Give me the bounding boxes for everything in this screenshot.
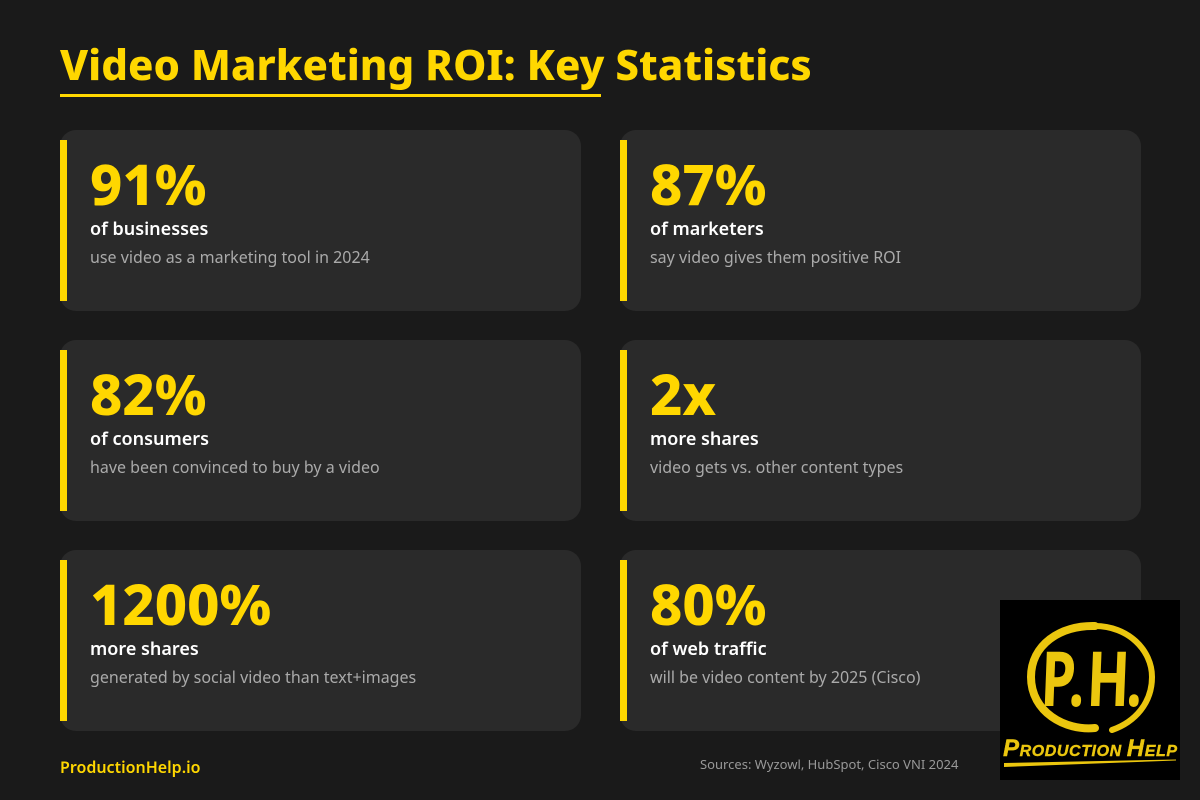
panel: 2x more shares: more shares (650, 427, 759, 451)
panel: 82% of consumers: of consumers (90, 427, 209, 451)
title: Video Marketing ROI: Key Statistics (60, 36, 812, 93)
panel: 91% of businesses: of businesses (90, 217, 208, 241)
panel: 82% of consumers (60, 340, 581, 521)
panel: 80% of web traffic: will be video content by 2025 (Cisco) (650, 666, 921, 688)
logo: Production Help (1000, 600, 1180, 780)
panel: 2x more shares: video gets vs. other content types (650, 456, 903, 478)
panel: 80% of web traffic: 80% (650, 566, 766, 642)
panel: 80% of web traffic (620, 550, 1141, 731)
panel: 1200% more shares (60, 550, 581, 731)
panel: 2x more shares: 2x (650, 356, 716, 432)
icon: P.H. monogram: P.H. (1039, 625, 1145, 729)
panel: 82% of consumers: have been convinced to buy by a video (90, 456, 380, 478)
panel: 91% of businesses (60, 130, 581, 311)
panel: 80% of web traffic: of web traffic (650, 637, 767, 661)
panel: 87% of marketers (620, 130, 1141, 311)
logo underline (1004, 760, 1176, 767)
panel: 91% of businesses: 91% (90, 146, 206, 222)
icon: brush circle (1031, 626, 1152, 730)
panel: 1200% more shares: more shares (90, 637, 199, 661)
panel: 87% of marketers: of marketers (650, 217, 764, 241)
panel: 91% of businesses: use video as a marketing tool in 2024 (90, 246, 370, 268)
footer brand: ProductionHelp.io (60, 756, 201, 778)
panel: 1200% more shares: 1200% (90, 566, 271, 642)
panel: 87% of marketers: 87% (650, 146, 766, 222)
panel: 1200% more shares: generated by social video than text+images (90, 666, 416, 688)
sources: Sources: Wyzowl, HubSpot, Cisco VNI 2024 (700, 755, 959, 773)
panel: 2x more shares (620, 340, 1141, 521)
panel: 87% of marketers: say video gives them positive ROI (650, 246, 901, 268)
panel: 82% of consumers: 82% (90, 356, 206, 432)
logo wordmark: PRODUCTION HELP (1003, 735, 1177, 762)
